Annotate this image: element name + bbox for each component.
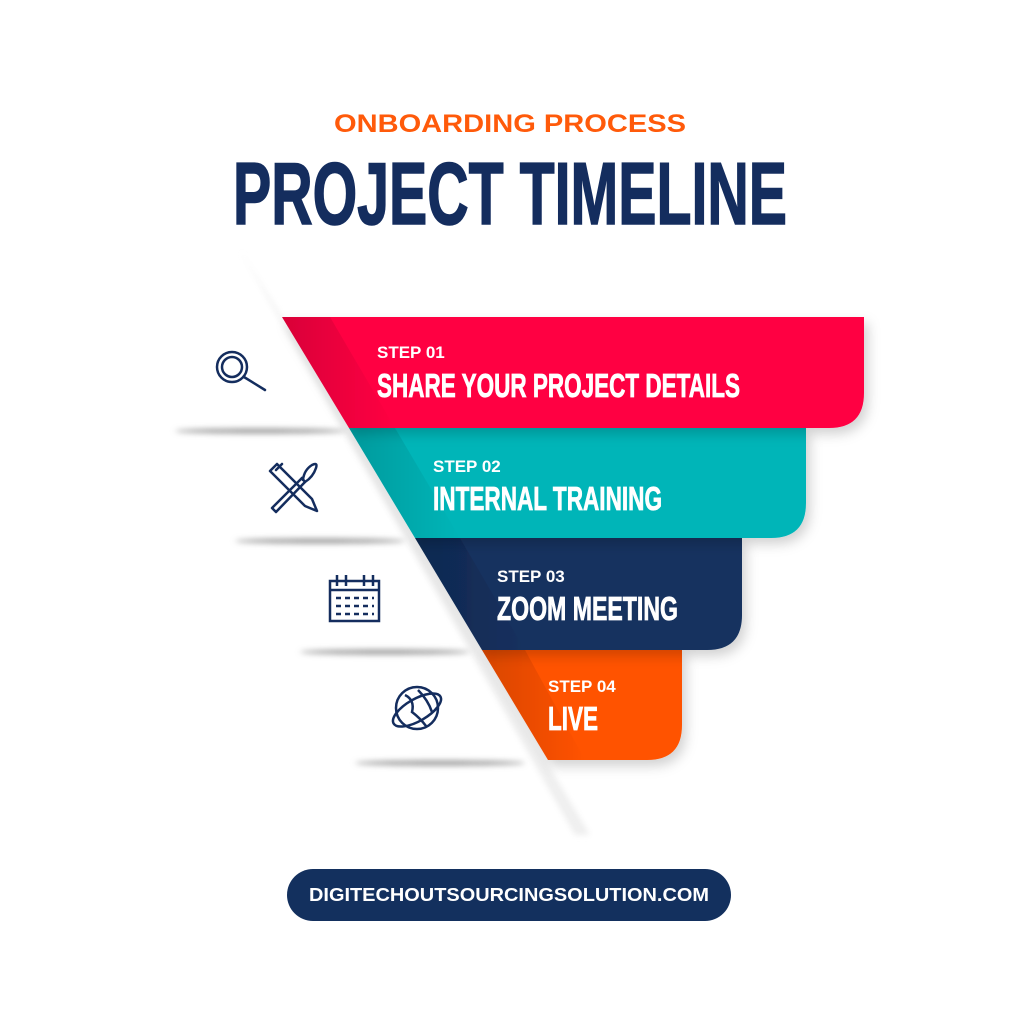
band: step 02: INTERNAL TRAINING (433, 480, 662, 517)
icon: calendar (330, 575, 379, 621)
band: step 01 (282, 317, 864, 428)
band: step 03: STEP 03 (497, 567, 565, 586)
band: step 01: STEP 01 (377, 343, 445, 362)
diagonal shadow edge (240, 250, 590, 835)
subtitle: ONBOARDING PROCESS (334, 110, 686, 138)
band: step 04 (482, 650, 682, 760)
band: step 04: STEP 04 (548, 677, 616, 696)
band: step 04: LIVE (548, 700, 598, 737)
band: step 01: SHARE YOUR PROJECT DETAILS (377, 367, 740, 404)
footer url pill (287, 869, 731, 921)
band: step 03: ZOOM MEETING (497, 590, 678, 627)
footer url pill: DIGITECHOUTSOURCINGSOLUTION.COM (309, 885, 709, 905)
icon: globe (388, 687, 446, 733)
band: step 03 (415, 538, 742, 650)
step shadows under icons (175, 428, 525, 766)
icon: magnifier (217, 352, 265, 390)
icon: pencil and brush (270, 464, 317, 512)
band: step 02: STEP 02 (433, 457, 501, 476)
band: step 02 (349, 428, 806, 538)
